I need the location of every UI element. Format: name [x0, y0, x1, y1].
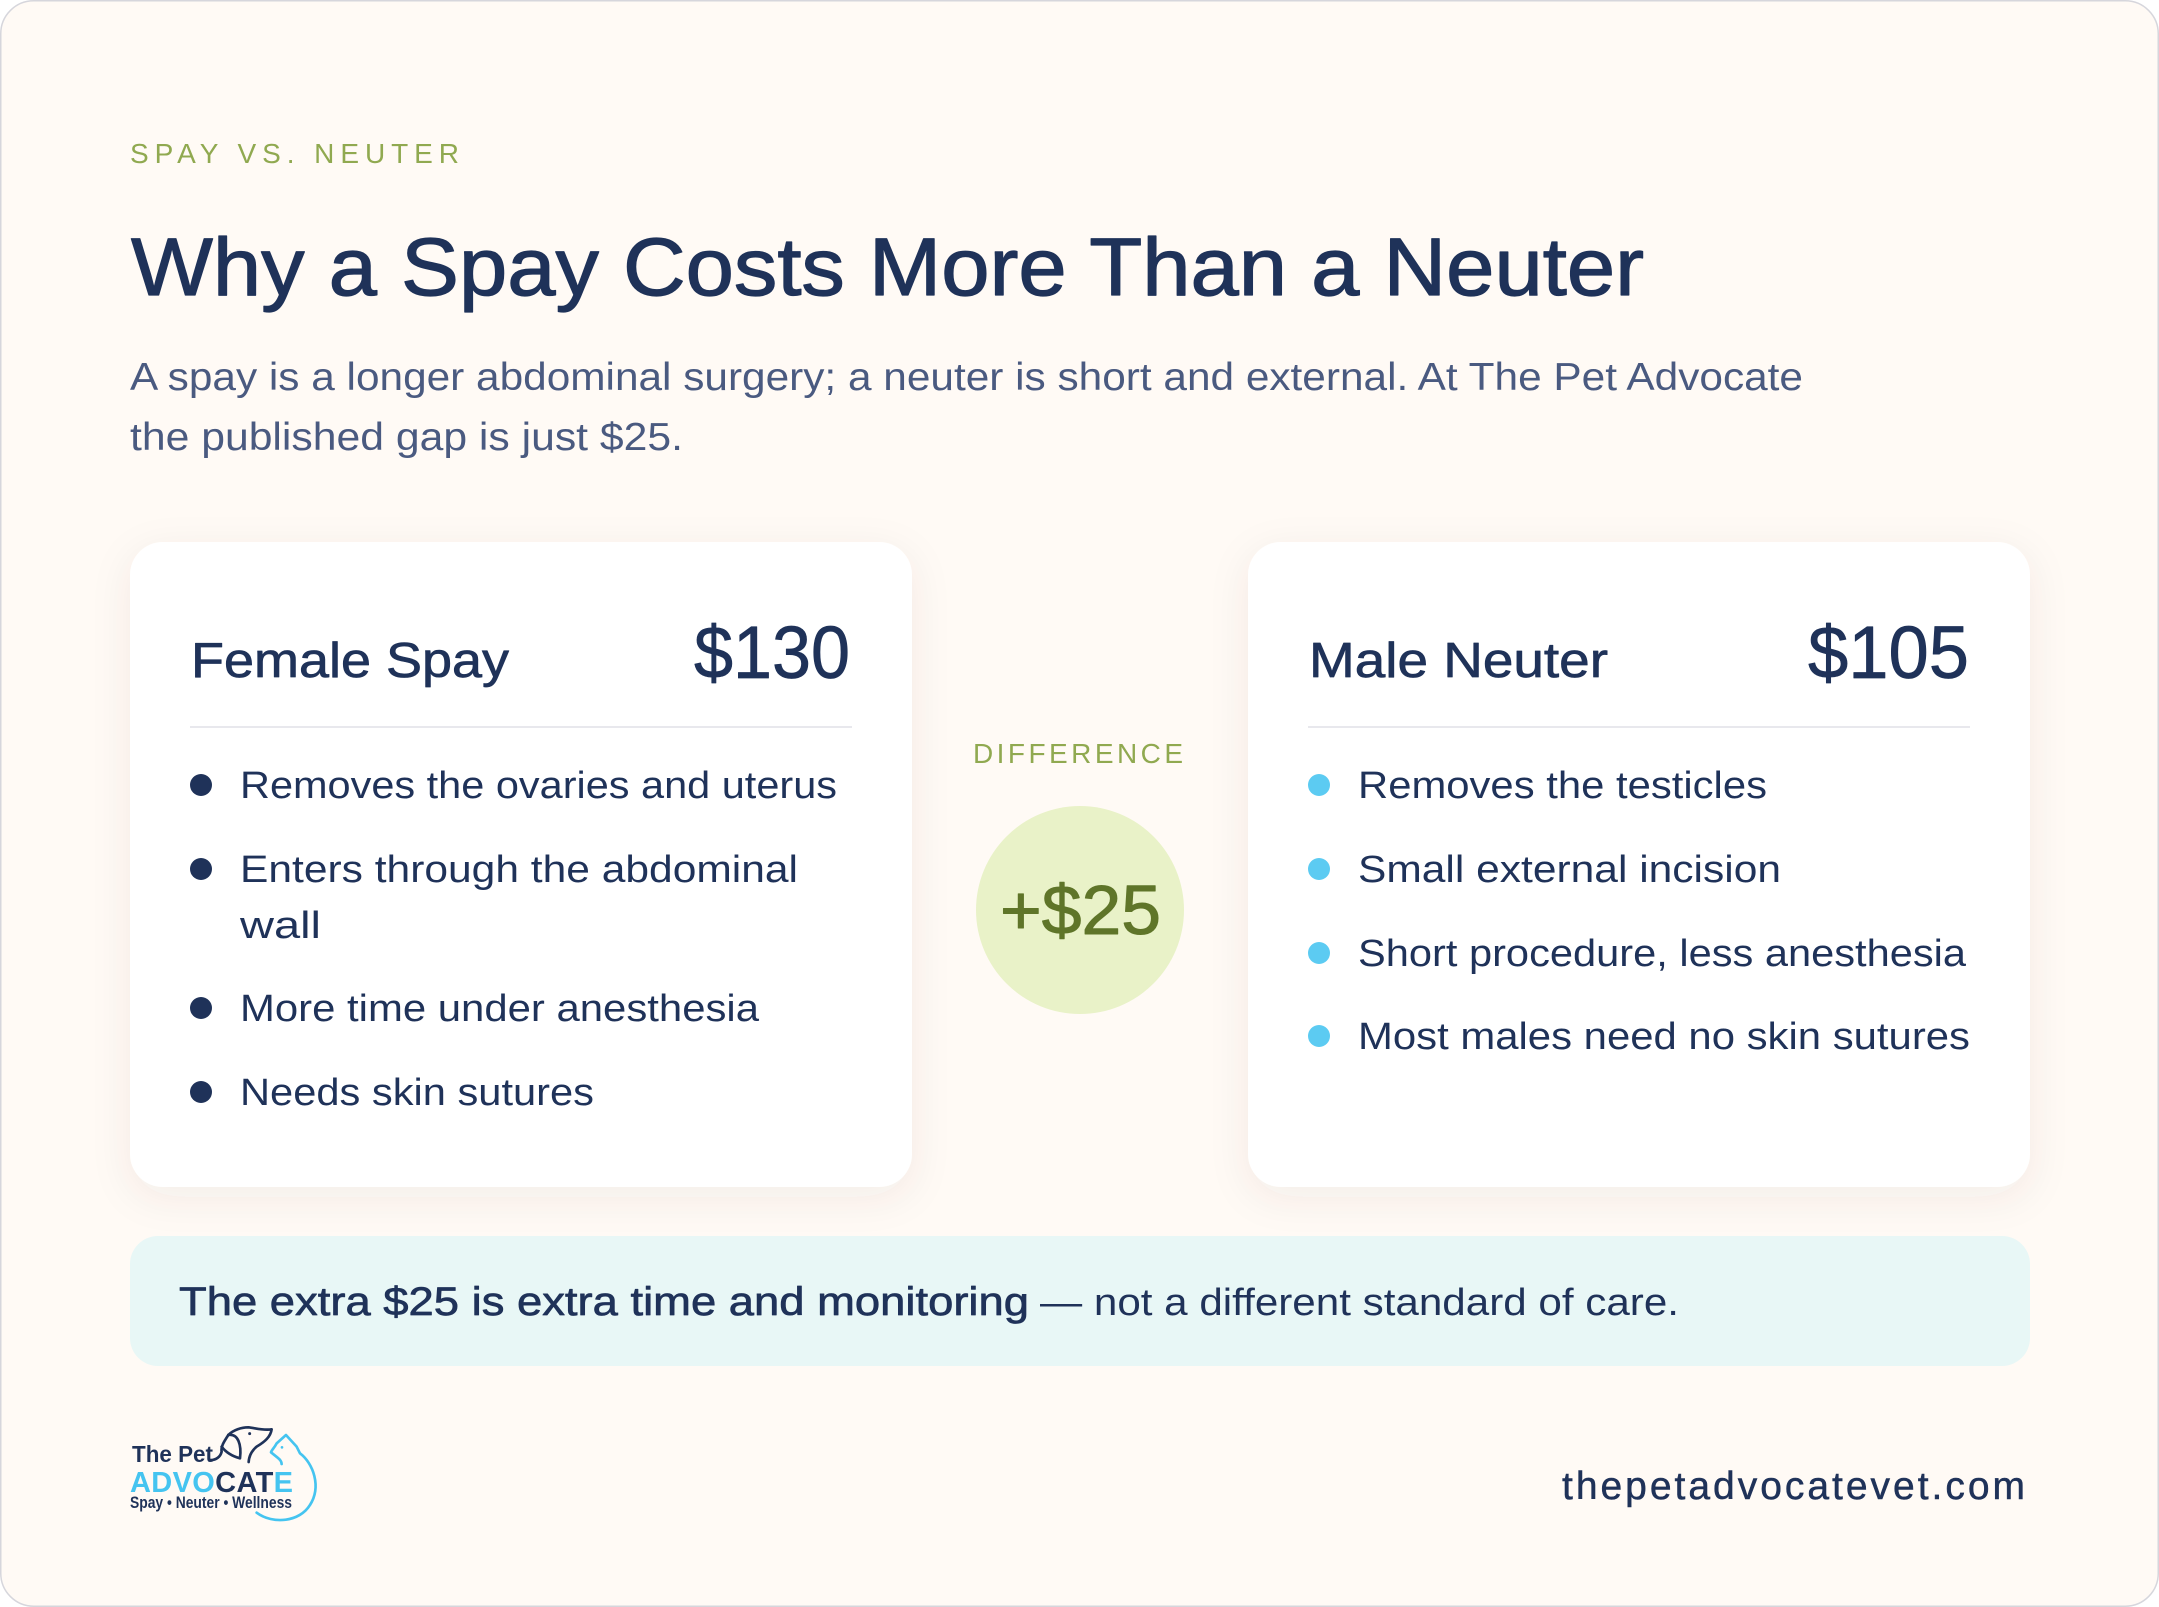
panel: female spay [130, 542, 912, 1187]
logo wordmark [130, 1441, 293, 1512]
bullet list: female spay: Removes the ovaries and uterus [240, 765, 837, 807]
bullet list: male neuter: Removes the testicles [1358, 765, 1767, 807]
heading: female spay: Female Spay [191, 634, 510, 688]
difference label: DIFFERENCE [973, 738, 1183, 769]
logo wordmark: Spay • Neuter • Wellness [130, 1493, 292, 1512]
callout regular text: — not a different standard of care. [1040, 1282, 1679, 1324]
bullet list: female spay: More time under anesthesia [240, 988, 760, 1030]
logo [130, 1427, 316, 1520]
logo wordmark: The Pet [132, 1441, 213, 1467]
bullet list: female spay: wall [239, 905, 321, 947]
bullet list: male neuter: Small external incision [1358, 849, 1781, 891]
subtitle: A spay is a longer abdominal surgery; a neuter is short and external. At The Pet Advocate [130, 356, 1803, 399]
heading: male neuter: Male Neuter [1309, 634, 1608, 688]
difference circle [976, 806, 1184, 1014]
price: $105: $105 [1808, 611, 1969, 694]
icon: dog and cat outline [209, 1427, 316, 1520]
bullet list: male neuter: Most males need no skin sutures [1358, 1016, 1970, 1058]
title: Why a Spay Costs More Than a Neuter [131, 222, 1644, 313]
bullet list: male neuter: Short procedure, less anesthesia [1358, 933, 1967, 975]
logo wordmark: ADVOCATE [130, 1467, 293, 1499]
bullet list: female spay: Needs skin sutures [240, 1072, 594, 1114]
bullet list: female spay [190, 765, 837, 1114]
price: $130: $130 [694, 611, 850, 694]
difference badge [973, 738, 1184, 1014]
bullet list: male neuter [1308, 765, 1970, 1058]
callout strong text: The extra $25 is extra time and monitoring [179, 1280, 1029, 1324]
callout [130, 1236, 2030, 1366]
website url: thepetadvocatevet.com [1562, 1465, 2025, 1508]
subtitle [130, 356, 1803, 459]
difference value: +$25 [1000, 871, 1161, 949]
panel: male neuter [1248, 542, 2030, 1187]
eyebrow label: SPAY VS. NEUTER [130, 138, 459, 169]
bullet list: female spay: Enters through the abdominal [240, 849, 798, 891]
subtitle: the published gap is just $25. [130, 416, 683, 459]
